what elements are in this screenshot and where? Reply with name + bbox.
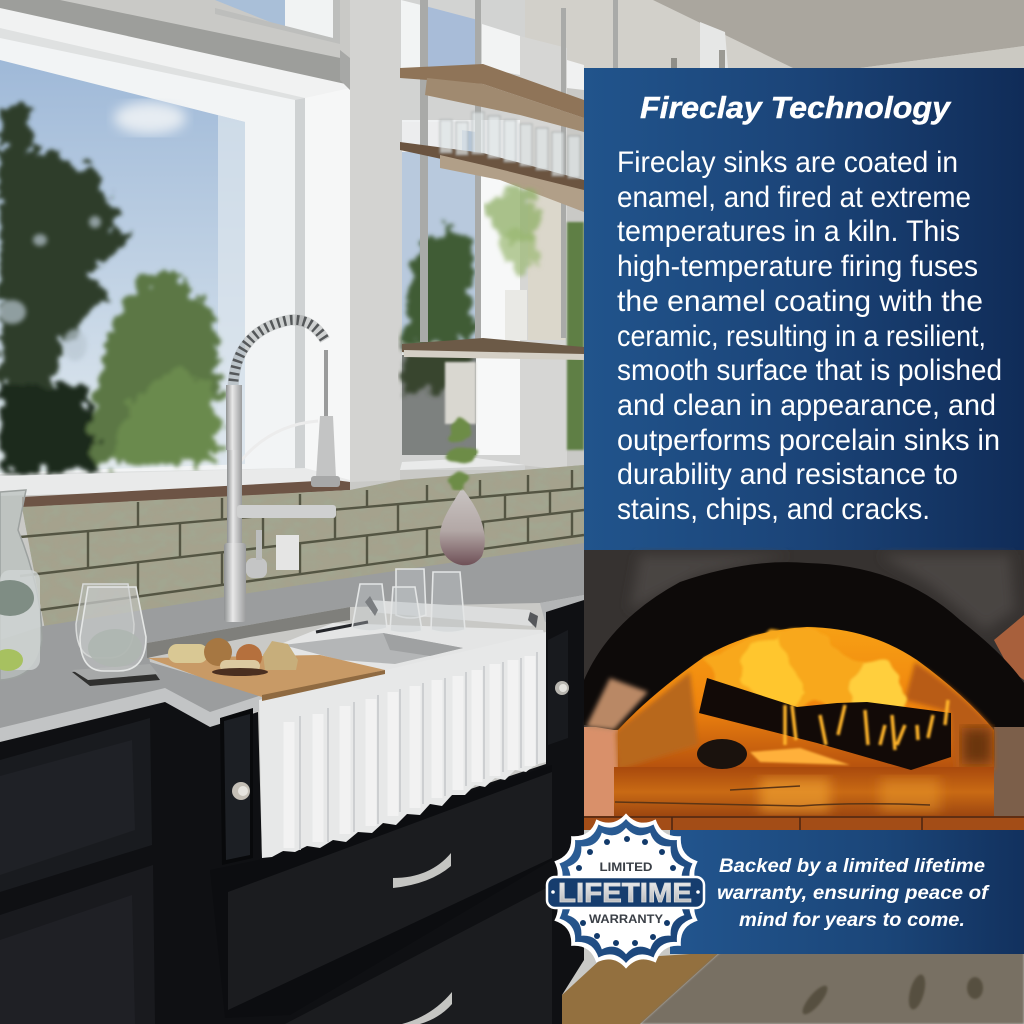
heading: Fireclay Technology xyxy=(640,90,952,125)
trees reflected in window xyxy=(0,108,218,473)
panel: fireclay technology xyxy=(584,68,1024,550)
drying rack and glasses xyxy=(316,569,538,633)
warranty banner: Backed by a limited lifetime xyxy=(719,856,985,877)
fire opening xyxy=(618,627,994,770)
body text: and clean in appearance, and xyxy=(617,389,996,422)
warranty banner: mind for years to come. xyxy=(739,910,965,931)
plant vase on shelf xyxy=(505,290,527,340)
window sill xyxy=(22,480,350,509)
glass pitcher xyxy=(0,490,42,680)
wall pier xyxy=(350,0,400,482)
fluted farmhouse sink xyxy=(259,623,546,858)
floor xyxy=(562,952,1024,1024)
cutting board with mushrooms xyxy=(148,638,385,701)
badge: limited lifetime warranty: LIMITED xyxy=(600,862,652,874)
upper window xyxy=(215,0,340,44)
oven pillars xyxy=(584,727,620,817)
badge: limited lifetime warranty xyxy=(547,813,704,969)
body text xyxy=(617,146,1002,526)
body text: temperatures in a kiln. This xyxy=(617,215,960,248)
left window xyxy=(0,0,350,496)
countertop xyxy=(0,543,584,742)
badge dots xyxy=(576,836,676,946)
hanging plant xyxy=(489,191,541,272)
glasses on shelf xyxy=(440,112,580,178)
body text: enamel, and fired at extreme xyxy=(617,181,971,214)
black arch xyxy=(584,562,1024,730)
ceiling xyxy=(520,0,1024,68)
warranty banner xyxy=(670,830,1024,954)
wooden shelves xyxy=(400,64,584,360)
body text: high-temperature firing fuses xyxy=(617,250,978,283)
flames xyxy=(705,631,910,722)
right window with shelves xyxy=(400,0,584,470)
cabinet base xyxy=(0,600,584,1024)
body text: smooth surface that is polished xyxy=(617,354,1002,387)
body text: durability and resistance to xyxy=(617,458,958,491)
photo: fire in kiln oven xyxy=(584,550,1024,830)
hearth floor xyxy=(614,767,994,817)
body text: the enamel coating with the xyxy=(617,285,983,318)
body text: outperforms porcelain sinks in xyxy=(617,424,1000,457)
water glasses and napkin xyxy=(72,584,160,686)
hanging rods xyxy=(420,0,618,342)
body text: Fireclay sinks are coated in xyxy=(617,146,958,179)
faucet xyxy=(224,320,340,622)
badge: limited lifetime warranty: LIFETIME xyxy=(558,877,692,908)
log xyxy=(699,678,951,770)
body text: stains, chips, and cracks. xyxy=(617,493,930,526)
warranty banner: warranty, ensuring peace of xyxy=(717,883,990,904)
brick backsplash xyxy=(20,465,584,630)
drawer handles and knobs xyxy=(232,681,569,1024)
badge: limited lifetime warranty: WARRANTY xyxy=(589,914,663,926)
body text: ceramic, resulting in a resilient, xyxy=(617,320,986,353)
vase with plant xyxy=(440,420,485,565)
